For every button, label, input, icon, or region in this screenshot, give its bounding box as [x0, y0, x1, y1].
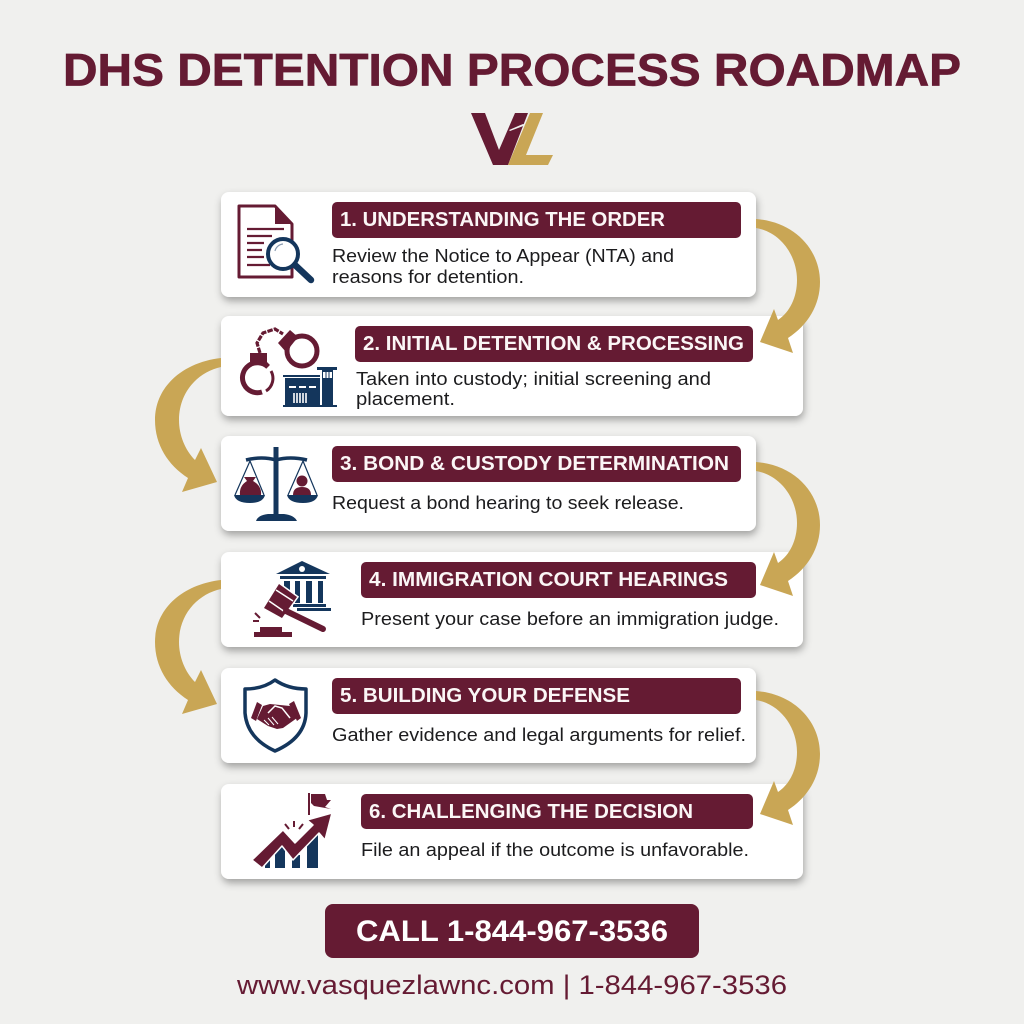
panel: step 3 bond and custody: [221, 436, 756, 531]
panel: step 6 challenging the decision: [221, 784, 803, 879]
description: placement.: [356, 388, 455, 409]
panel: step 4 immigration court: [221, 552, 803, 647]
panel: step 2 initial detention: [221, 316, 803, 416]
arrow: step 2 to 3: [155, 358, 221, 492]
arrow: step 3 to 4: [756, 462, 820, 596]
heading text: 3. BOND & CUSTODY DETERMINATION: [340, 453, 729, 475]
heading bar: [332, 678, 741, 714]
call button: CALL 1-844-967-3536: [356, 915, 668, 948]
icon: rising arrow with flag and bars: [252, 793, 332, 868]
heading bar: [355, 326, 753, 362]
heading text: 1. UNDERSTANDING THE ORDER: [340, 209, 666, 231]
heading bar: [361, 562, 756, 598]
arrow: step 4 to 5: [155, 580, 221, 714]
heading bar: [332, 446, 741, 482]
icon: document with magnifier: [239, 206, 311, 280]
icon: courthouse and gavel: [253, 561, 331, 637]
logo: VL monogram: [471, 113, 553, 165]
description: File an appeal if the outcome is unfavorable.: [361, 839, 749, 860]
icon: shield with handshake: [245, 680, 306, 751]
heading text: 2. INITIAL DETENTION & PROCESSING: [363, 333, 744, 355]
icon: handcuffs and detention building: [242, 329, 337, 407]
heading bar: [332, 202, 741, 238]
title: DHS DETENTION PROCESS ROADMAP: [63, 44, 961, 96]
heading bar: [361, 794, 753, 829]
heading text: 5. BUILDING YOUR DEFENSE: [340, 685, 630, 707]
icon: scales of justice: [234, 447, 318, 521]
description: Present your case before an immigration judge.: [361, 608, 779, 629]
description: Gather evidence and legal arguments for relief.: [332, 724, 746, 745]
description: Request a bond hearing to seek release.: [332, 492, 684, 513]
call button: [325, 904, 699, 958]
footer contact line: www.vasquezlawnc.com | 1-844-967-3536: [236, 970, 787, 1000]
heading text: 4. IMMIGRATION COURT HEARINGS: [369, 569, 728, 591]
arrow: step 5 to 6: [756, 691, 820, 825]
heading text: 6. CHALLENGING THE DECISION: [369, 801, 693, 823]
description: Taken into custody; initial screening and: [356, 368, 711, 389]
arrow: step 1 to 2: [756, 219, 820, 353]
panel: step 5 building your defense: [221, 668, 756, 763]
description: Review the Notice to Appear (NTA) and: [332, 245, 674, 266]
description: reasons for detention.: [332, 266, 524, 287]
panel: step 1 understanding the order: [221, 192, 756, 297]
